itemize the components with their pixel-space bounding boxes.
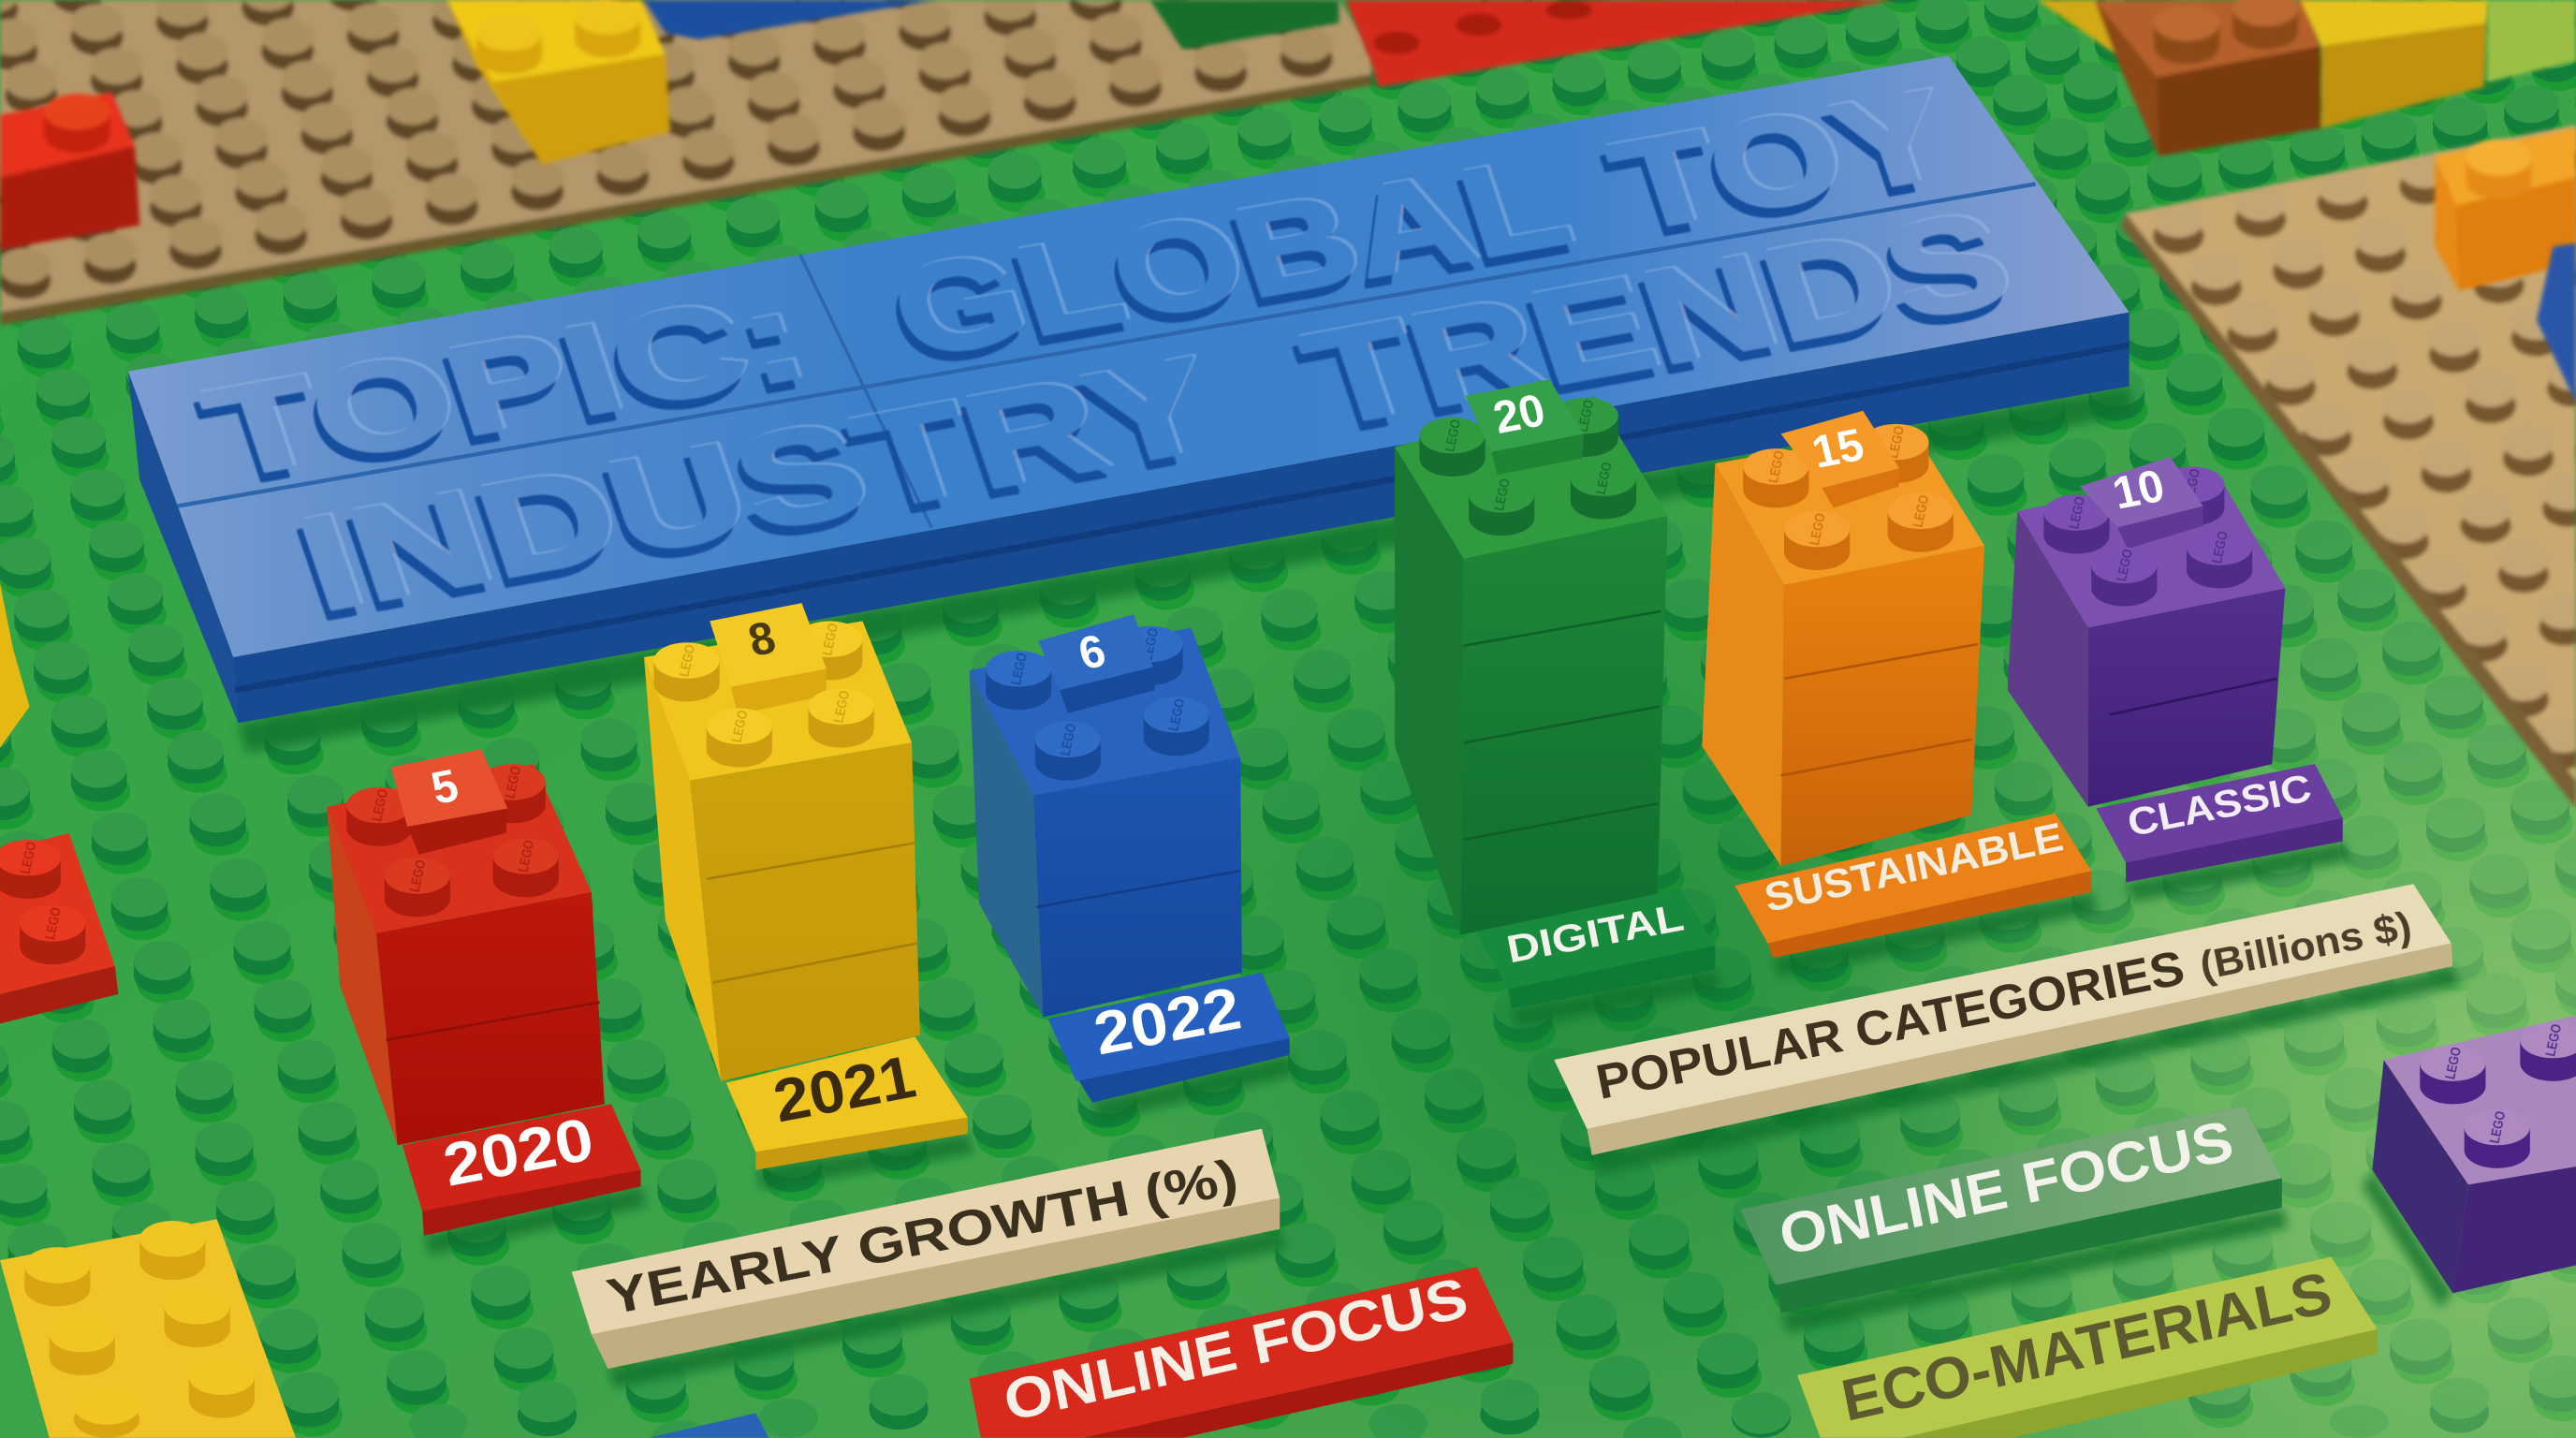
bar: 2022 value 6 (970, 614, 1242, 1017)
background brick: purple right (2372, 1016, 2576, 1293)
value tile: 15: 15 (1808, 419, 1869, 478)
value tile: 10: 10 (2108, 461, 2170, 520)
title text: TRENDS (1287, 185, 2027, 455)
background brick: blue top (644, 0, 936, 39)
bar: sustainable value 15 (1702, 411, 1984, 866)
label tile: 2022: 2022 (1089, 975, 1246, 1068)
contact shadows on the baseplate (238, 386, 2459, 1388)
value tile: 5 (391, 749, 507, 855)
title slab (128, 56, 2130, 723)
baseplate studs along the bottom edge (409, 1374, 2489, 1438)
legend bar: yearly growth: YEARLY GROWTH (%) (602, 1149, 1242, 1326)
background brick: brown top right (2037, 0, 2321, 156)
legend bar: popular categories (1554, 884, 2452, 1155)
label tile: classic: CLASSIC (2124, 766, 2315, 844)
value tile: 6 (1038, 614, 1155, 713)
value tile: 10 (2080, 457, 2203, 549)
value tile: 15 (1781, 411, 1899, 507)
label tile: sustainable: SUSTAINABLE (1761, 814, 2067, 921)
bar: 2020 value 5 (327, 749, 605, 1145)
tag: online focus green (1740, 1106, 2282, 1313)
background brick: blue bottom (649, 1413, 768, 1438)
title text (189, 65, 2027, 639)
background brick: yellow top (446, 0, 670, 165)
legend bar: yearly growth (572, 1129, 1280, 1369)
title text: TOPIC: (189, 265, 822, 505)
value tile: 8: 8 (743, 612, 781, 667)
background brick: lime corner (2487, 0, 2576, 82)
label tile: 2020: 2020 (438, 1105, 599, 1199)
value tile: 8 (710, 603, 827, 714)
background brick: yellow bottom left (0, 1219, 296, 1438)
background brick: red left middle (0, 833, 118, 1023)
label tile: sustainable (1734, 814, 2091, 958)
background brick: yellow left sliver (0, 583, 30, 748)
legend bar: popular categories: (Billions $) (2196, 903, 2415, 989)
tan plate: top right (2121, 121, 2576, 809)
tag: online focus red: ONLINE FOCUS (999, 1265, 1472, 1433)
legend bar: popular categories: POPULAR CATEGORIES (1591, 940, 2188, 1109)
label tile: 2021 (726, 1036, 968, 1170)
label tile: digital (1476, 889, 1715, 1009)
bar: classic value 10 (2008, 457, 2285, 807)
label tile: 2021: 2021 (768, 1042, 921, 1135)
tan plate: top left (0, 0, 1374, 328)
label tile: digital: DIGITAL (1503, 895, 1688, 971)
bar: digital value 20 (1395, 379, 1667, 935)
label tile: classic (2097, 764, 2343, 882)
background brick: red top (1345, 0, 1895, 87)
background brick: green top (1150, 0, 1339, 50)
background brick: yellow top right (2300, 0, 2489, 128)
title text: GLOBAL (875, 131, 1584, 384)
label tile: 2020 (402, 1104, 640, 1236)
background brick: orange right (2435, 128, 2576, 291)
background brick: blue right (2537, 243, 2576, 403)
bar: 2021 value 8 (644, 603, 920, 1081)
background brick: red left (0, 92, 139, 250)
label tile: 2022 (1048, 973, 1290, 1103)
title text: TOY (1595, 65, 1967, 257)
value tile: 20: 20 (1488, 385, 1550, 444)
tag: eco-materials: ECO-MATERIALS (1837, 1260, 2337, 1434)
value tile: 20 (1466, 379, 1584, 475)
title text: INDUSTRY (282, 330, 1234, 639)
value tile: 5: 5 (426, 760, 463, 814)
tag: online focus green: ONLINE FOCUS (1774, 1108, 2238, 1268)
value tile: 6: 6 (1074, 625, 1111, 680)
